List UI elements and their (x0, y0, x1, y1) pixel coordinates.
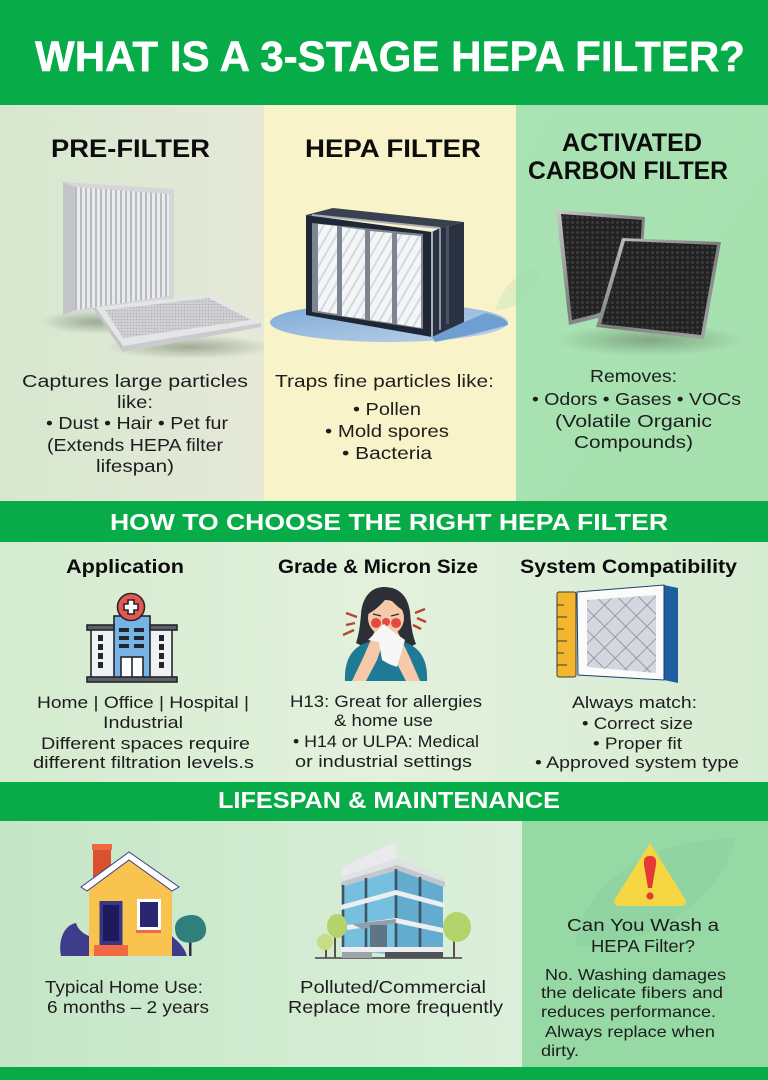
text: compatibility description (535, 693, 739, 772)
text: application description (33, 693, 254, 772)
text: carbon description: Removes: (590, 366, 677, 386)
section band: lifespan and maintenance (0, 782, 768, 821)
text: polluted or commercial: Replace more frequently (288, 997, 503, 1017)
text: HEPA description: Traps fine particles like: (275, 371, 494, 391)
decorative leaf (495, 268, 540, 310)
text: pre-filter description: • Dust • Hair • Pet fur (46, 413, 228, 433)
text: wash answer: No. Washing damages (545, 967, 726, 984)
text: wash answer: the delicate fibers and (541, 985, 723, 1002)
text: compatibility description: • Approved system type (535, 753, 739, 772)
section band: how to choose: HOW TO CHOOSE THE RIGHT HEPA FILTER (110, 509, 668, 535)
text: wash answer: Always replace when (545, 1024, 715, 1041)
icon: pre-filter panels (40, 182, 275, 359)
text: HEPA description (275, 371, 494, 463)
heading: HEPA filter: HEPA FILTER (305, 135, 481, 163)
text: pre-filter description (22, 371, 248, 476)
text: carbon description: Compounds) (574, 432, 693, 452)
heading: wash question: Can You Wash a (567, 915, 719, 935)
icon: carbon filter panels (555, 210, 745, 356)
icon: filter with ruler (557, 585, 678, 683)
section band: lifespan and maintenance: LIFESPAN & MAINTENANCE (218, 787, 560, 813)
text: compatibility description: • Proper fit (593, 734, 682, 753)
icon: sneezing woman (343, 587, 427, 681)
panel: lifespan (0, 821, 522, 1067)
text: wash answer: dirty. (541, 1043, 579, 1060)
text: application description: different filtration levels.s (33, 753, 254, 772)
icon: office building (315, 842, 471, 959)
text: pre-filter description: (Extends HEPA filter (47, 435, 223, 455)
text: typical home use: Typical Home Use: (45, 977, 203, 997)
column: system compatibility: System Compatibility (520, 556, 737, 578)
title banner: WHAT IS A 3-STAGE HEPA FILTER? (35, 33, 745, 81)
column: grade and micron size: Grade & Micron Size (278, 556, 478, 578)
icon: HEPA filter box (270, 208, 508, 342)
text: compatibility description: • Correct size (582, 714, 693, 733)
footer band (0, 1067, 768, 1080)
text: grade description: or industrial settings (295, 752, 472, 771)
panel: activated carbon filter (495, 105, 768, 501)
column: application: Application (66, 556, 184, 578)
text: application description: Different spaces require (41, 734, 250, 753)
text: application description: Home | Office | Hospital | (37, 693, 249, 712)
text: compatibility description: Always match: (572, 693, 697, 712)
text: HEPA description: • Bacteria (342, 443, 432, 463)
heading: wash question (567, 915, 719, 956)
heading: wash question: HEPA Filter? (591, 936, 695, 956)
text: typical home use (45, 977, 209, 1017)
text: pre-filter description: like: (117, 392, 153, 412)
text: HEPA description: • Pollen (353, 399, 421, 419)
text: wash answer (541, 967, 726, 1060)
text: carbon description: (Volatile Organic (555, 411, 712, 431)
text: polluted or commercial: Polluted/Commercial (300, 977, 486, 997)
column: application (33, 556, 254, 772)
decorative leaf (575, 838, 735, 945)
text: HEPA description: • Mold spores (325, 421, 449, 441)
text: pre-filter description: lifespan) (96, 456, 174, 476)
panel: can you wash a HEPA filter (522, 821, 768, 1067)
panel: HEPA filter (264, 105, 516, 501)
title banner (0, 0, 768, 105)
text: wash answer: reduces performance. (541, 1004, 716, 1021)
text: polluted or commercial (288, 977, 503, 1017)
icon: hospital (87, 594, 177, 682)
heading: activated carbon filter: ACTIVATED (562, 129, 702, 157)
text: pre-filter description: Captures large particles (22, 371, 248, 391)
text: carbon description (532, 366, 741, 452)
text: grade description: • H14 or ULPA: Medical (293, 732, 479, 751)
panel: pre-filter (0, 105, 275, 501)
text: application description: Industrial (103, 713, 183, 732)
icon: warning triangle (614, 843, 686, 906)
heading: pre-filter: PRE-FILTER (51, 135, 210, 163)
text: grade description: & home use (334, 711, 433, 730)
icon: house (60, 844, 206, 956)
section band: how to choose (0, 501, 768, 542)
heading: activated carbon filter: CARBON FILTER (528, 157, 728, 185)
text: grade description (290, 692, 482, 771)
text: carbon description: • Odors • Gases • VOCs (532, 389, 741, 409)
column: system compatibility (520, 556, 739, 772)
heading: activated carbon filter (528, 129, 728, 185)
text: typical home use: 6 months – 2 years (47, 997, 209, 1017)
column: grade and micron size (278, 556, 482, 771)
text: grade description: H13: Great for allergies (290, 692, 482, 711)
panel: how to choose (0, 542, 768, 782)
